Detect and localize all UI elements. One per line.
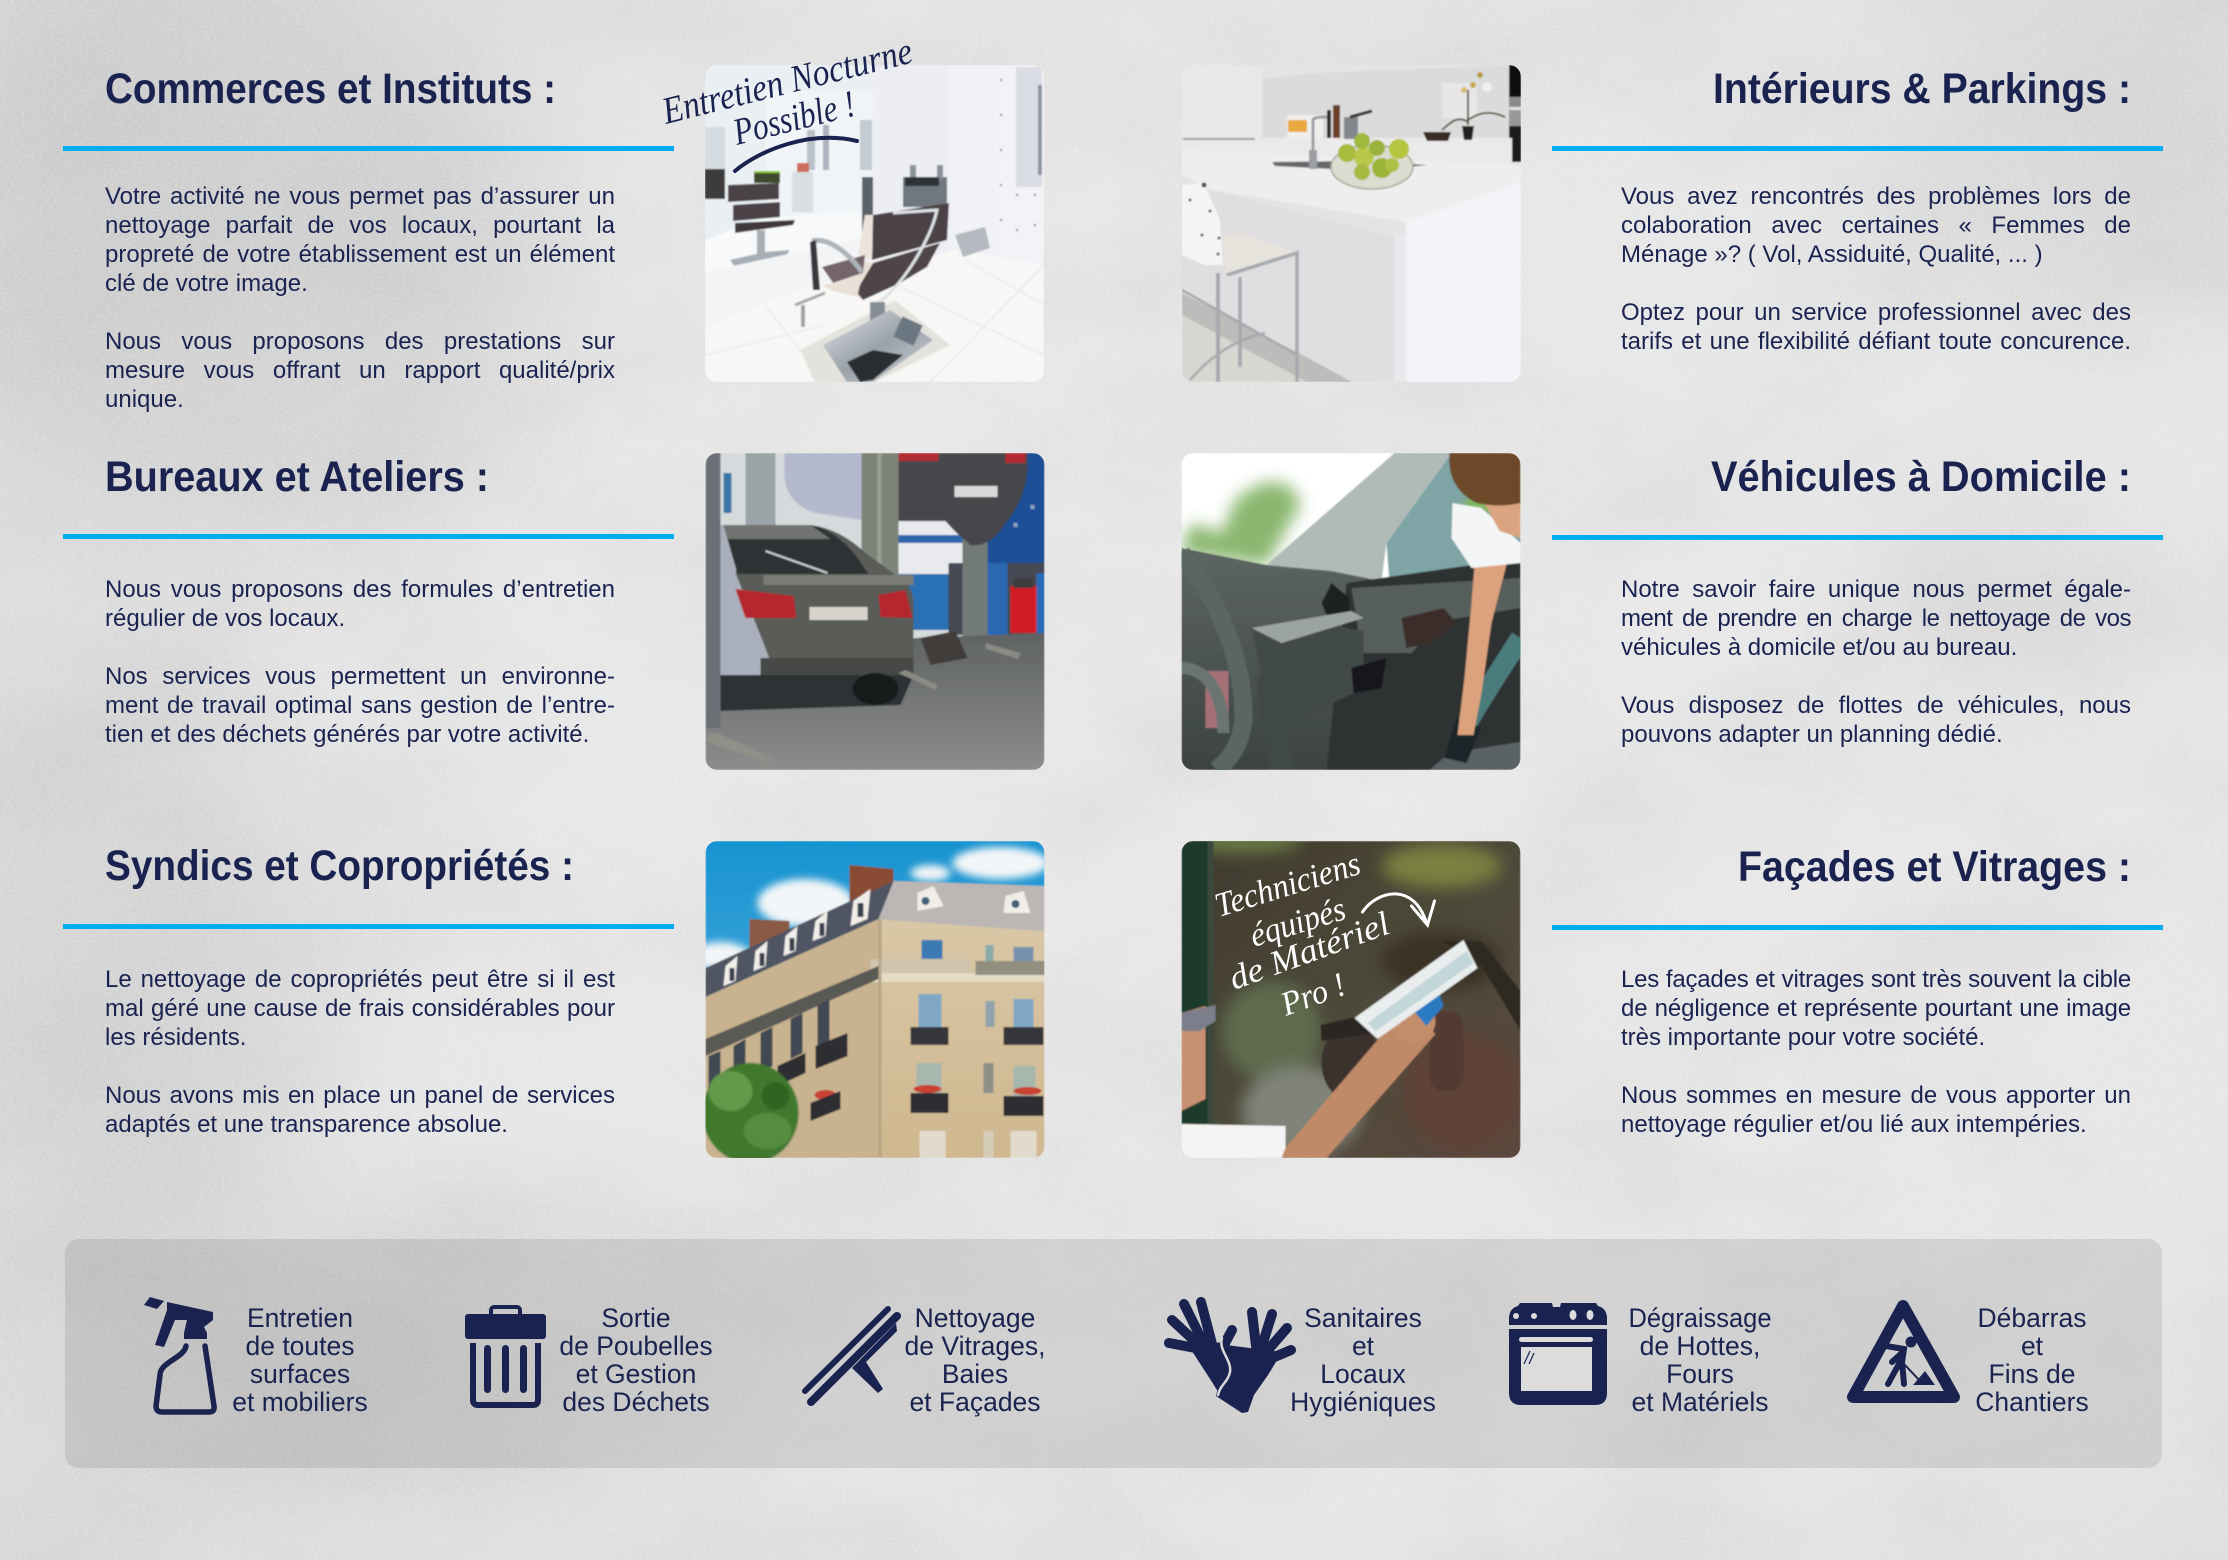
label: Entretien de toutes surfaces et mobiliers: et mobiliers <box>232 1387 368 1417</box>
label: Débarras et Fins de Chantiers: Chantiers <box>1975 1387 2089 1417</box>
label: Entretien de toutes surfaces et mobiliers: surfaces <box>250 1359 350 1389</box>
text block: Intérieurs & Parkings: Optez pour un service professionnel avec des <box>1621 299 2131 326</box>
text block: Commerces et Instituts: clé de votre image. <box>105 270 308 297</box>
heading: Commerces et Instituts: Commerces et Instituts : <box>105 65 556 113</box>
text block: Façades et Vitrages: très importante pour votre société. <box>1621 1024 1985 1051</box>
label: Nettoyage de Vitrages, Baies et Façades: de Vitrages, <box>905 1331 1045 1361</box>
label: Sortie de Poubelles et Gestion des Déchets <box>559 1303 713 1417</box>
text block: Bureaux et Ateliers: régulier de vos locaux. <box>105 605 345 632</box>
label: Sanitaires et Locaux Hygiéniques: Locaux <box>1320 1359 1406 1389</box>
text block: Commerces et Instituts: mesure vous offrant un rapport qualité/prix <box>105 357 615 384</box>
label: Entretien de toutes surfaces et mobiliers: de toutes <box>245 1331 355 1361</box>
text block: Syndics et Copropriétés: Le nettoyage de copropriétés peut être si il est <box>105 966 615 993</box>
label: Dégraissage de Hottes, Fours et Matériels: de Hottes, <box>1640 1331 1760 1361</box>
text block: Syndics et Copropriétés: mal géré une cause de frais considérables pour <box>105 995 615 1022</box>
photo: Haussmann building <box>706 841 1044 1158</box>
heading: Intérieurs & Parkings: Intérieurs & Parkings : <box>1713 65 2131 113</box>
text block: Véhicules à Domicile: ment de prendre en charge le nettoyage de vos <box>1621 605 2131 632</box>
label: Sanitaires et Locaux Hygiéniques: Sanitaires <box>1304 1303 1422 1333</box>
text block: Syndics et Copropriétés: adaptés et une transparence absolue. <box>105 1111 508 1138</box>
text block: Véhicules à Domicile: pouvons adapter un planning dédié. <box>1621 721 2003 748</box>
label: Débarras et Fins de Chantiers: Débarras <box>1978 1303 2086 1333</box>
photo: vacuuming car interior <box>1182 453 1520 770</box>
text block: Commerces et Instituts: unique. <box>105 386 184 413</box>
callout: Entretien Nocturne Possible !: Entretien Nocturne <box>657 30 917 133</box>
photo: garage <box>706 453 1044 770</box>
text block: Bureaux et Ateliers: Nos services vous permettent un environne- <box>105 663 615 690</box>
text block: Façades et Vitrages <box>1621 966 2131 1138</box>
label: Sortie de Poubelles et Gestion des Déchets: de Poubelles <box>559 1331 713 1361</box>
text block: Véhicules à Domicile <box>1621 576 2131 748</box>
callout: Techniciens équipés de Matériel Pro !: Pro ! <box>1275 966 1351 1024</box>
photo: window cleaning <box>1182 841 1520 1158</box>
label: Sortie de Poubelles et Gestion des Déchets: et Gestion <box>576 1359 696 1389</box>
icon: construction sign <box>1853 1306 1954 1397</box>
text block: Bureaux et Ateliers: ment de travail optimal sans gestion de l’entre- <box>105 692 615 719</box>
label: Nettoyage de Vitrages, Baies et Façades: et Façades <box>909 1387 1041 1417</box>
text block: Syndics et Copropriétés: Nous avons mis en place un panel de services <box>105 1082 615 1109</box>
text block: Façades et Vitrages: Nous sommes en mesure de vous apporter un <box>1621 1082 2131 1109</box>
label: Dégraissage de Hottes, Fours et Matériels: Dégraissage <box>1628 1303 1772 1333</box>
label: Dégraissage de Hottes, Fours et Matériels: et Matériels <box>1632 1387 1768 1417</box>
label: Dégraissage de Hottes, Fours et Matériels <box>1628 1303 1772 1417</box>
label: Nettoyage de Vitrages, Baies et Façades <box>905 1303 1045 1417</box>
text block: Syndics et Copropriétés: les résidents. <box>105 1024 246 1051</box>
text block: Intérieurs & Parkings: Vous avez rencontrés des problèmes lors de <box>1621 183 2131 210</box>
text block: Intérieurs & Parkings: tarifs et une flexibilité défiant toute concurence. <box>1621 328 2131 355</box>
label: Débarras et Fins de Chantiers: Fins de <box>1989 1359 2075 1389</box>
arrow: curved white arrow <box>1362 894 1434 925</box>
text block: Façades et Vitrages: de négligence et représente pourtant une image <box>1621 995 2131 1022</box>
text block: Façades et Vitrages: nettoyage régulier et/ou lié aux intempéries. <box>1621 1111 2087 1138</box>
text block: Commerces et Instituts: nettoyage parfait de vos locaux, pourtant la <box>105 212 615 239</box>
text block: Commerces et Instituts: propreté de votre établissement est un élément <box>105 241 615 268</box>
icon: spray bottle <box>144 1297 214 1412</box>
icon: oven <box>1509 1303 1607 1405</box>
photo: hair salon <box>705 65 1044 382</box>
photo: white kitchen <box>1182 65 1521 382</box>
icon: trash can <box>465 1307 546 1405</box>
callout: Entretien Nocturne Possible ! <box>657 30 917 171</box>
callout: Techniciens équipés de Matériel Pro ! <box>1211 845 1395 1024</box>
callout: Entretien Nocturne Possible !: Possible ! <box>728 83 859 154</box>
label: Entretien de toutes surfaces et mobiliers: Entretien <box>247 1303 353 1333</box>
heading: Bureaux et Ateliers: Bureaux et Ateliers : <box>105 453 489 501</box>
text block: Intérieurs & Parkings: colaboration avec certaines « Femmes de <box>1621 212 2131 239</box>
label: Sortie de Poubelles et Gestion des Déchets: Sortie <box>601 1303 671 1333</box>
label: Débarras et Fins de Chantiers <box>1975 1303 2089 1417</box>
heading: Véhicules à Domicile: Véhicules à Domicile : <box>1711 453 2131 501</box>
label: Sanitaires et Locaux Hygiéniques <box>1290 1303 1436 1417</box>
icon: rubber gloves <box>1169 1302 1291 1413</box>
text block: Véhicules à Domicile: véhicules à domicile et/ou au bureau. <box>1621 634 2017 661</box>
callout: Techniciens équipés de Matériel Pro !: de Matériel <box>1224 905 1395 998</box>
text block: Véhicules à Domicile: Notre savoir faire unique nous permet égale- <box>1621 576 2131 603</box>
text block: Commerces et Instituts <box>105 183 615 413</box>
text block: Façades et Vitrages: Les façades et vitrages sont très souvent la cible <box>1621 966 2131 993</box>
label: Dégraissage de Hottes, Fours et Matériels: Fours <box>1666 1359 1734 1389</box>
label: Débarras et Fins de Chantiers: et <box>2021 1331 2044 1361</box>
text block: Véhicules à Domicile: Vous disposez de flottes de véhicules, nous <box>1621 692 2131 719</box>
label: Nettoyage de Vitrages, Baies et Façades: Baies <box>942 1359 1008 1389</box>
callout: Techniciens équipés de Matériel Pro !: équipés <box>1246 891 1350 955</box>
label: Sanitaires et Locaux Hygiéniques: et <box>1352 1331 1375 1361</box>
text block: Commerces et Instituts: Nous vous proposons des prestations sur <box>105 328 615 355</box>
label: Entretien de toutes surfaces et mobiliers <box>232 1303 368 1417</box>
services panel <box>65 1239 2162 1468</box>
heading: Façades et Vitrages: Façades et Vitrages : <box>1738 843 2131 891</box>
text block: Bureaux et Ateliers: tien et des déchets générés par votre activité. <box>105 721 589 748</box>
label: Sortie de Poubelles et Gestion des Déchets: des Déchets <box>562 1387 710 1417</box>
text block: Commerces et Instituts: Votre activité ne vous permet pas d’assurer un <box>105 183 615 210</box>
text block: Intérieurs & Parkings <box>1621 183 2131 355</box>
text block: Bureaux et Ateliers <box>105 576 615 748</box>
callout: Techniciens équipés de Matériel Pro !: Techniciens <box>1211 845 1365 925</box>
text block: Intérieurs & Parkings: Ménage »? ( Vol, Assiduité, Qualité, ... ) <box>1621 241 2043 268</box>
heading: Syndics et Copropriétés: Syndics et Copropriétés : <box>105 842 574 890</box>
label: Nettoyage de Vitrages, Baies et Façades: Nettoyage <box>915 1303 1035 1333</box>
icon: squeegee <box>805 1309 897 1402</box>
label: Sanitaires et Locaux Hygiéniques: Hygiéniques <box>1290 1387 1436 1417</box>
text block: Bureaux et Ateliers: Nous vous proposons des formules d’entretien <box>105 576 615 603</box>
text block: Syndics et Copropriétés <box>105 966 615 1138</box>
